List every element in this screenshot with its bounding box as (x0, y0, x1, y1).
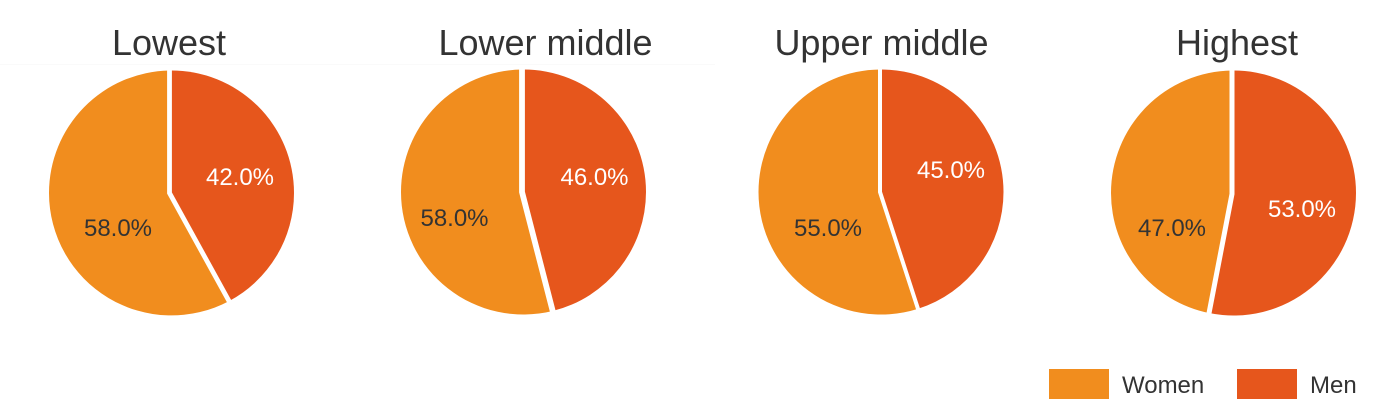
legend (1049, 369, 1357, 399)
value: women 58.0%: 58.0% (84, 215, 152, 242)
value: men 42.0%: 42.0% (206, 164, 274, 191)
wedge: men 46% (522, 70, 646, 311)
heading: Upper middle: Upper middle (774, 22, 989, 63)
heading: Lowest: Lowest (112, 22, 226, 63)
pie panel: Lower middle (401, 22, 653, 318)
wedge: women 54% (401, 70, 553, 315)
value: women 55.0%: 55.0% (794, 215, 862, 242)
value: women 47.0%: 47.0% (1138, 215, 1206, 242)
pie panel: Upper middle (758, 22, 1004, 315)
wedge: men 45% (880, 69, 1004, 309)
wedge: women 58% (49, 71, 229, 315)
wedge: women 47% (1111, 71, 1232, 313)
legend swatch: women (1049, 369, 1109, 399)
heading: Lower middle: Lower middle (438, 22, 653, 63)
value: women 58.0%: 58.0% (420, 205, 489, 232)
legend label: women: Women (1122, 372, 1204, 399)
wedge: men 53% (1209, 71, 1356, 316)
wedge: women 55% (758, 70, 918, 315)
wedge: men 42% (170, 71, 294, 301)
value: men 45.0%: 45.0% (917, 157, 985, 184)
value: men 46.0%: 46.0% (560, 164, 629, 191)
legend swatch: men (1237, 369, 1297, 399)
value: men 53.0%: 53.0% (1268, 196, 1336, 223)
legend label: men: Men (1310, 372, 1357, 399)
pie panel: Highest (1111, 22, 1356, 321)
pie panel: Lowest (49, 22, 294, 315)
heading: Highest: Highest (1176, 22, 1298, 63)
